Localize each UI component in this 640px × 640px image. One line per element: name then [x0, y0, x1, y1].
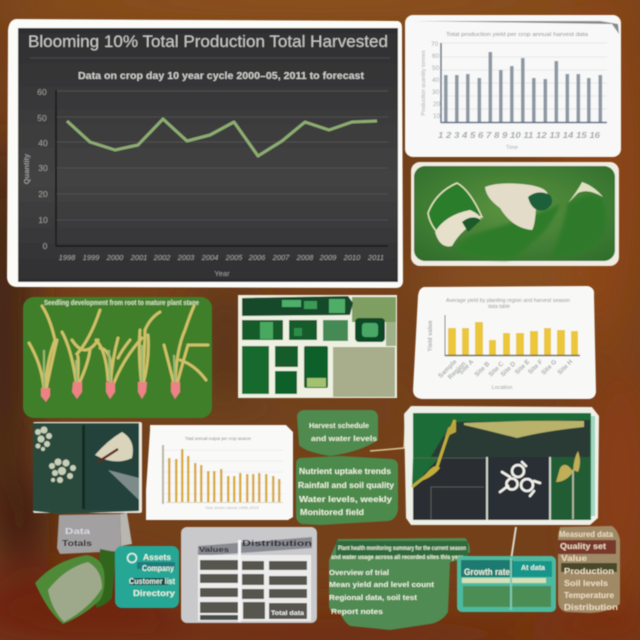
x axis labels: 2007 [272, 253, 290, 262]
note text: Measured data [559, 530, 614, 539]
panel: yellow bar chart: Region [447, 360, 467, 381]
bars [444, 52, 602, 122]
table rows [198, 555, 311, 621]
card text: Customer list [129, 577, 175, 586]
stalk [412, 420, 455, 487]
x axis labels: 2005 [225, 253, 243, 262]
x axis labels: 2002 [153, 253, 171, 262]
table heading: Distribution [242, 539, 312, 548]
panel: small teal card [115, 546, 179, 608]
note text: Rainfall and soil quality [298, 481, 395, 490]
note text: Quality set [560, 542, 606, 551]
panel: main line chart [7, 19, 403, 288]
bars [448, 322, 578, 355]
note text: Harvest schedule [309, 423, 369, 430]
panel: yellow bar chart: Location [492, 385, 512, 391]
note text [298, 467, 395, 517]
axis labels: 70 [431, 41, 439, 48]
chart title: Total annual output per crop season [185, 436, 251, 441]
white bloom right [568, 182, 603, 203]
axis labels: 50 [432, 65, 440, 72]
panel: yellow bar chart: Site A [458, 358, 476, 376]
panel: leaf illustration [411, 162, 619, 266]
panel: small grey card [57, 513, 132, 554]
panel: yellow bar chart [413, 286, 596, 399]
note text: Regional data, soil test [329, 593, 418, 602]
axis labels: 40 [432, 77, 440, 84]
x axis labels: 2011 [367, 253, 384, 262]
note text: Overview of trial [329, 568, 389, 577]
axis caption: Year series values 1998–2015 [205, 505, 259, 510]
panel: yellow bar chart: Site D [499, 360, 518, 378]
x axis labels: 2009 [319, 253, 337, 262]
panel: beige note [558, 526, 620, 613]
field grid [413, 457, 486, 520]
card text: Company [142, 564, 174, 573]
x axis title: Year [214, 269, 230, 278]
icon: recycle mark [128, 554, 136, 562]
panel: yellow bar chart: data table [488, 304, 510, 310]
seed clusters [35, 426, 76, 483]
panel: field diagram [404, 406, 599, 525]
note text [329, 545, 466, 616]
y axis labels: 10 [38, 215, 48, 225]
panel: yellow bar chart: Site G [540, 358, 558, 377]
axis labels: Yield value [428, 320, 434, 352]
note text: Monitored field [300, 508, 364, 517]
axis labels [421, 41, 601, 151]
note text: Value [561, 554, 588, 563]
panel caption: Seedling development from root to mature plant stage [44, 300, 199, 307]
axis labels: 60 [432, 53, 440, 60]
banner leaf [464, 421, 584, 438]
panel: yellow bar chart: Sample [437, 358, 459, 380]
white bloom left [428, 183, 482, 236]
panel: orange bar chart [146, 425, 293, 520]
white bloom centre [485, 183, 548, 230]
note text: Water levels, weekly [299, 495, 393, 504]
data line [67, 119, 377, 156]
bars [168, 449, 280, 502]
card text: Directory [133, 589, 176, 598]
x axis labels: 2006 [248, 253, 266, 262]
note text: Temperature [564, 591, 615, 600]
axis labels: Production quantity tonnes [421, 50, 427, 116]
x axis labels: 2008 [296, 253, 314, 262]
panel: top right bar chart [405, 15, 621, 157]
panel: teal note [457, 556, 556, 612]
panel: yellow bar chart: Site C [487, 360, 506, 378]
x axis labels: 2003 [177, 253, 195, 262]
cell label: Total data [271, 611, 305, 617]
panel: yellow bar chart: Site H [556, 358, 575, 376]
panel: dark photo of seeds [33, 422, 142, 514]
chart subtitle: Data on crop day 10 year cycle 2000–05, 2011 to forecast [78, 71, 365, 82]
note text [309, 423, 377, 443]
x axis labels: 2010 [343, 253, 361, 262]
axis labels: 30 [432, 89, 440, 96]
seed bulbs [41, 382, 180, 402]
chart title: Total production yield per crop annual harvest data [446, 32, 589, 38]
y axis labels: 20 [38, 189, 48, 199]
note text: Mean yield and level count [329, 580, 435, 589]
arrow: connector diagram to teal [511, 527, 516, 560]
panel: teal note: At data [521, 565, 545, 572]
symbol [500, 462, 540, 496]
panel: plant growth stages [23, 297, 212, 418]
card text: Assets [143, 553, 172, 562]
card text: Data [65, 526, 90, 536]
panel: green tile grid [238, 295, 397, 398]
card text [129, 553, 176, 598]
chart title: Blooming 10% Total Production Total Harvested [28, 33, 388, 51]
axis labels: 10 [433, 113, 441, 120]
axis labels: Time [506, 145, 518, 151]
leaf shape bottom [455, 204, 560, 260]
y axis title: Quantity [22, 153, 31, 184]
plant stems [29, 306, 208, 390]
panel: green note long [296, 456, 398, 525]
panel: yellow bar chart: Site E [514, 358, 532, 376]
plant right [572, 470, 574, 519]
y axis labels: 0 [43, 241, 48, 251]
chart title: Average yield by planting region and harvest season [446, 298, 570, 304]
panel: green note bottom [329, 538, 470, 630]
note text: Growth rate [464, 567, 510, 577]
note text: Nutrient uptake trends [299, 467, 392, 476]
x axis labels: 2001 [130, 253, 147, 262]
panel: green note short [297, 410, 378, 456]
note text: and water levels [311, 436, 377, 443]
y axis labels: 40 [38, 138, 48, 148]
card text [62, 526, 92, 548]
y axis labels: 50 [37, 113, 47, 123]
axis labels: 1 2 3 4 5 6 7 8 9 10 11 12 13 14 15 16 [438, 131, 601, 140]
x axis labels: 1999 [83, 253, 100, 262]
x axis labels [59, 253, 384, 262]
panel: yellow bar chart: Site B [473, 360, 492, 378]
arrow: connector note to diagram [370, 412, 406, 451]
note text: and water usage across all recorded sites this year [331, 555, 464, 561]
icon: green folded leaf [35, 549, 116, 624]
note text [559, 530, 618, 612]
line chart [22, 87, 388, 278]
x axis labels: 1998 [59, 253, 76, 262]
panel: grey table: Values [199, 547, 229, 554]
panel: grey table [181, 527, 317, 623]
note text: Soil levels [564, 579, 609, 588]
x axis labels: 2004 [201, 253, 218, 262]
x axis labels: 2000 [106, 253, 124, 262]
y axis labels: 30 [38, 163, 48, 173]
y axis labels [37, 87, 48, 251]
axis labels: 20 [433, 101, 441, 108]
note text: Plant health monitoring summary for the current season [338, 545, 466, 552]
note text: Production [564, 567, 614, 576]
note text: Report notes [331, 607, 383, 616]
panel: yellow bar chart: Site F [527, 358, 544, 376]
note text: Distribution [564, 603, 618, 612]
card text: Totals [62, 538, 92, 548]
y axis labels: 60 [37, 87, 47, 97]
